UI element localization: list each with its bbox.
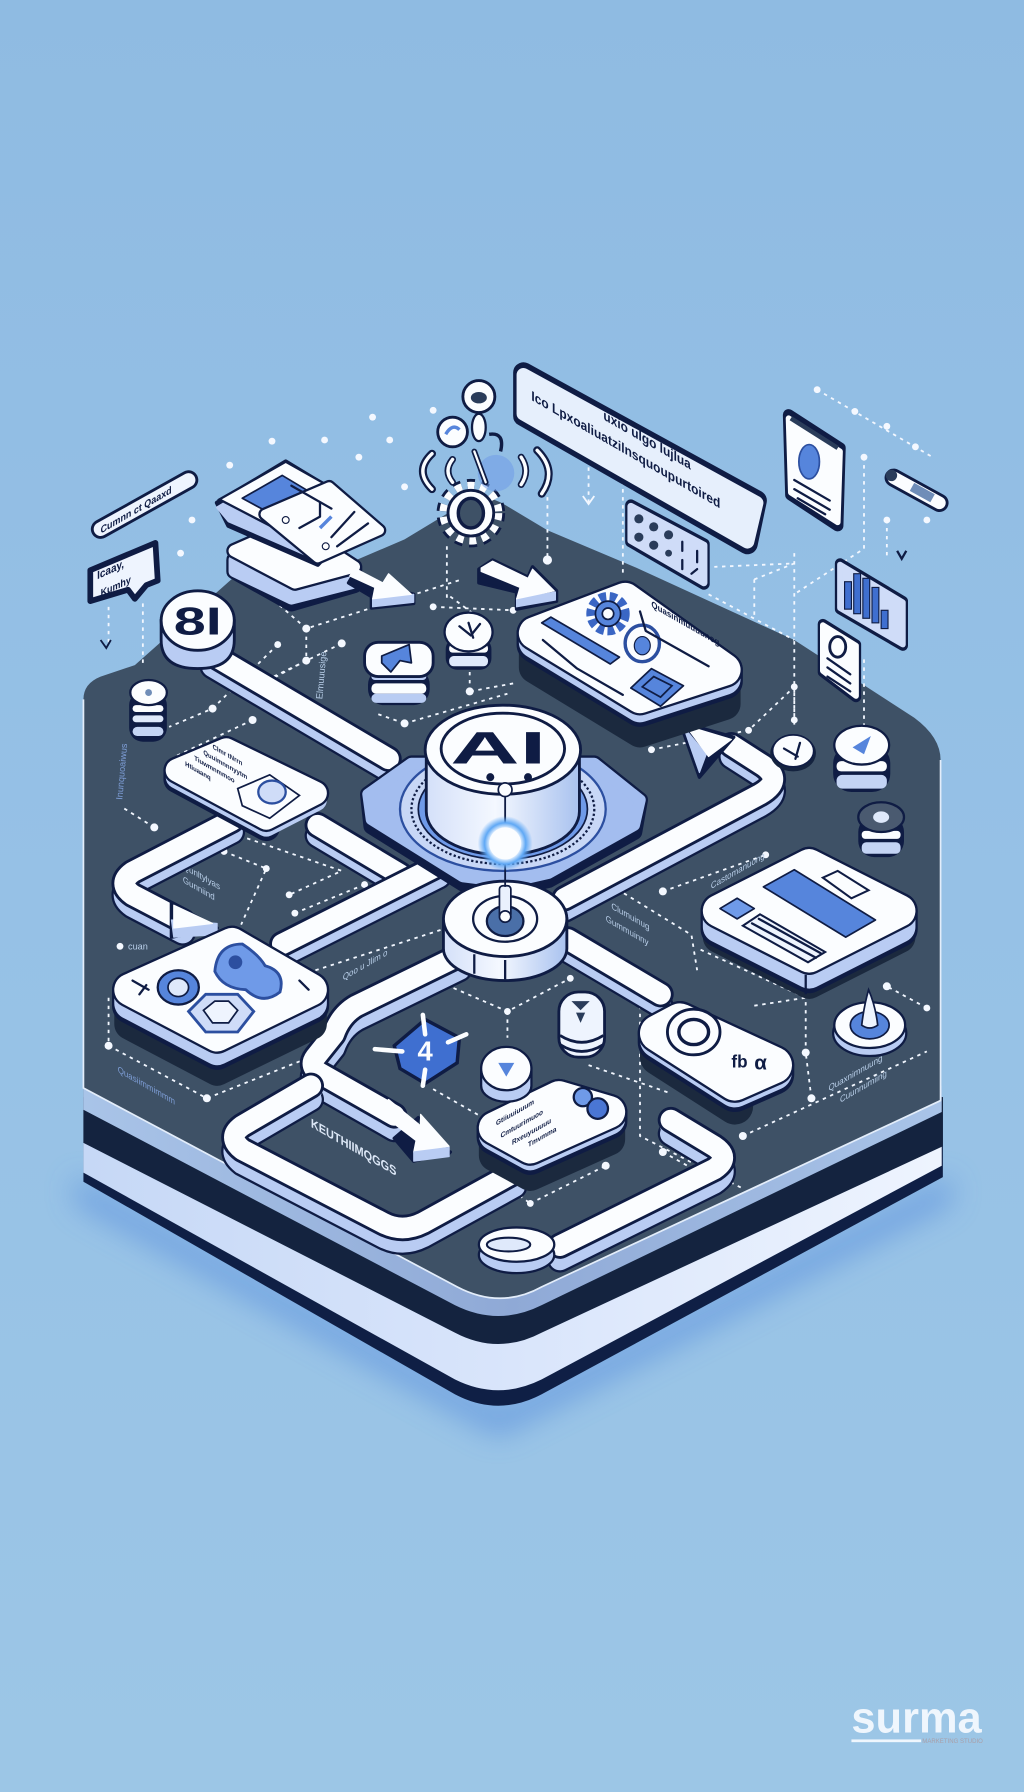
card: upper left note: Clmr tNrrn	[213, 744, 242, 768]
arrow: from doc stack	[349, 568, 414, 608]
card: upper left note: Tiuwmnmmoo	[194, 755, 235, 785]
icon: dark stack	[858, 802, 904, 857]
pipe: joint to pill card	[568, 939, 661, 1006]
card: upper left note	[177, 744, 315, 827]
card: right dashboard	[719, 865, 899, 994]
card: small text note: Rxeuyuuuuu	[512, 1115, 552, 1147]
small down arrows	[101, 496, 906, 648]
floor labels: cuan	[128, 942, 148, 952]
hub top disc	[425, 705, 581, 794]
speech bubble	[90, 543, 158, 601]
floor labels: Gummuinny	[606, 913, 649, 948]
card: pill with ring	[658, 1009, 774, 1106]
platform top surface	[83, 494, 941, 1298]
floor labels: Qoo u Jlim o	[343, 947, 387, 983]
arrow: centre top	[479, 560, 557, 609]
floating small icons	[438, 381, 502, 451]
button: 8I	[161, 591, 234, 669]
floating pill top left: Cumnn ct Qaaxd	[101, 485, 172, 537]
AI text: AI	[450, 722, 546, 773]
floating phone card	[789, 415, 840, 526]
doc stack	[217, 462, 379, 603]
card: left with blue icons	[130, 944, 311, 1070]
pipe: left bars	[282, 825, 439, 955]
floor labels: Castomanuong	[711, 850, 765, 891]
pipe: right arrow to top card	[565, 722, 773, 910]
card: small text note: Cmtuurimuoo	[501, 1107, 543, 1140]
card: small text note	[495, 1088, 609, 1175]
card: pill with ring: fb	[731, 1051, 748, 1071]
pipe: bottom loop	[234, 1086, 514, 1242]
hub cylinder	[426, 751, 579, 855]
card: pill with ring: α	[754, 1052, 767, 1075]
floating gear	[443, 486, 498, 541]
floating banner: uxio ulgo lujlua	[603, 407, 691, 473]
speech bubble: Kumhy	[101, 574, 131, 600]
top card with gear: Quasinmuuuunog	[651, 599, 719, 648]
top card with gear	[535, 597, 725, 731]
icon: right stack	[833, 726, 890, 792]
icon: left stack	[129, 680, 167, 742]
floating panel with dots	[631, 505, 704, 584]
floor labels: Quaxnimnuung	[829, 1052, 882, 1093]
logo: surma	[851, 1695, 983, 1743]
icon: blue emblem: 4	[418, 1036, 434, 1067]
card: small text note: Gtiiuuiuuum	[496, 1097, 534, 1128]
icon: pin	[833, 990, 906, 1056]
icon: small disc	[481, 1047, 531, 1102]
floor labels	[114, 651, 887, 1107]
floor labels: Qunltylyas	[183, 861, 220, 892]
floor labels: Clumuinug	[611, 901, 649, 932]
floating doc card	[823, 624, 856, 697]
floor labels: Elmuuusige	[314, 651, 328, 700]
isometric platform	[83, 494, 943, 1406]
hub base plate	[368, 763, 640, 889]
floating chart card	[840, 563, 903, 646]
dashed connector grid	[105, 386, 933, 1207]
speech bubble: Icaay,	[97, 558, 124, 582]
floating banner: Ico Lpxoaliuatzilnsquoupurtoired	[531, 388, 720, 512]
floor labels: Cuunnumiing	[840, 1068, 887, 1105]
logo: MARKETING STUDIO	[922, 1738, 983, 1745]
icon: gear	[591, 597, 625, 631]
floor labels: Inunquoaiwus	[114, 743, 129, 800]
pipe: top left bar	[213, 655, 389, 770]
pipe: joint down to arrow	[313, 955, 459, 1161]
floor labels: Quasiimmimmm	[118, 1064, 175, 1107]
pipe: left loop with arrow	[125, 821, 232, 937]
label inside bottom loop: KEUTHIIMQGGS	[311, 1116, 396, 1179]
button: 8I: 8I	[174, 600, 222, 643]
pipe: right hook and spoon	[479, 1120, 723, 1273]
icon: platform stack with chevron	[365, 642, 433, 705]
glow node	[478, 797, 533, 887]
card: small text note: Tmvmma	[528, 1124, 557, 1149]
icon: cylinder	[559, 992, 605, 1057]
card: upper left note: Htiuaanq	[185, 761, 211, 782]
AI hub	[368, 705, 640, 889]
joint hub	[443, 881, 567, 981]
icon: right disc	[770, 735, 816, 771]
connector node dots	[105, 386, 930, 1207]
icon: blue emblem	[375, 1015, 466, 1086]
platform shadow	[75, 1177, 951, 1435]
floating pill right	[886, 470, 939, 503]
floating banner	[523, 373, 757, 544]
floating signal arcs	[423, 450, 549, 494]
hub ring	[400, 747, 606, 871]
icon: small stack	[445, 613, 493, 670]
card: upper left note: Quuimnnnyytm	[203, 749, 247, 781]
floor labels: Gunniind	[183, 874, 215, 903]
